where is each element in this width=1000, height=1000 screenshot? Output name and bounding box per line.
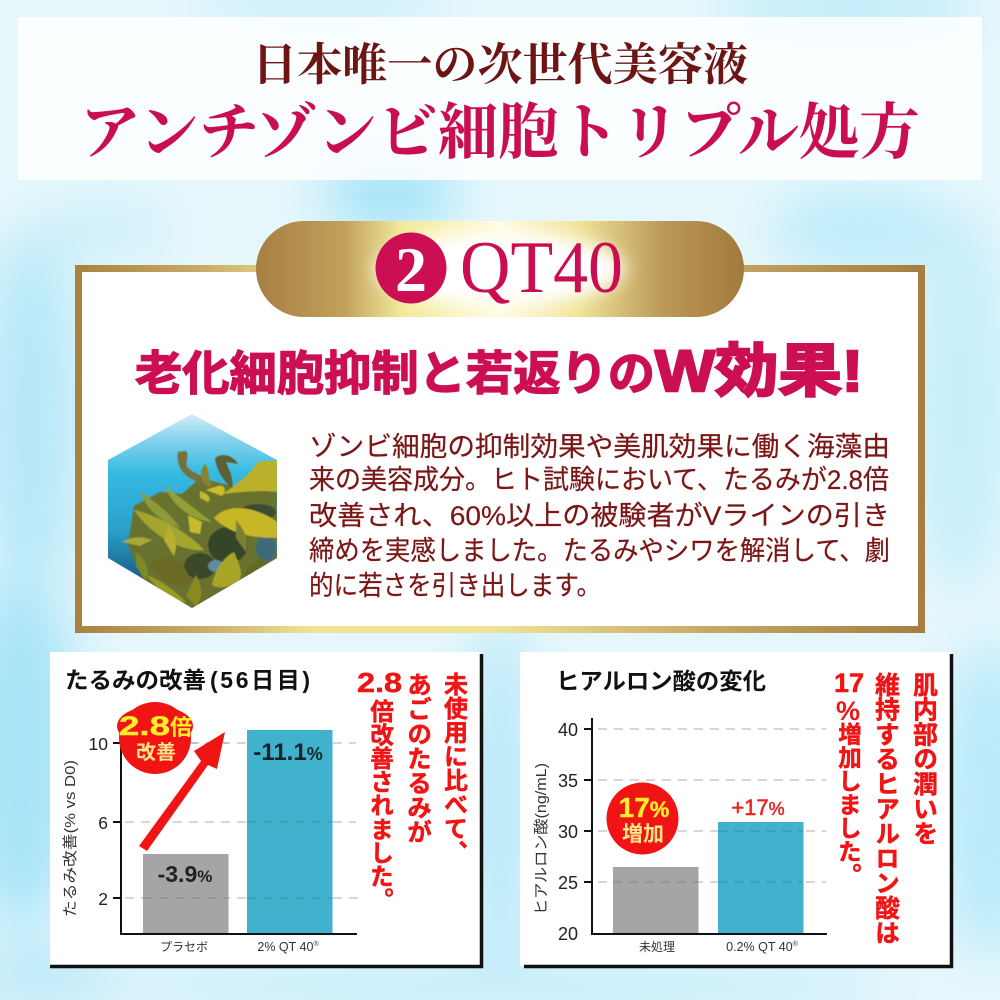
body text	[309, 432, 890, 601]
bar chart: sagging: 6	[98, 813, 108, 833]
body text: 締めを実感しました。たるみやシワを解消して、劇	[309, 536, 890, 566]
chart title: たるみの改善	[65, 667, 206, 693]
bar chart: hyaluronic acid: 40	[558, 720, 578, 740]
headline: W効果!	[655, 339, 863, 404]
badge: 17%: 17%	[619, 792, 669, 823]
number badge	[376, 232, 446, 305]
badge: 2.8x: 2.8	[119, 711, 170, 741]
bar chart: hyaluronic acid	[533, 718, 827, 954]
value: +17%: +17%	[731, 795, 785, 820]
side copy: あごのたるみが	[404, 672, 431, 844]
chart title: (56日目)	[210, 667, 310, 693]
badge: 2.8x	[117, 702, 193, 774]
chart card: sagging improvement	[50, 652, 482, 966]
x labels: プラセボ	[160, 940, 208, 954]
hexagon seaweed image	[108, 414, 278, 610]
bar chart: sagging	[62, 730, 364, 954]
badge: 17%: 増加	[622, 823, 664, 846]
bar: untreated	[613, 867, 698, 933]
title band	[18, 17, 982, 180]
body text: 改善され、60%以上の被験者がVラインの引き	[309, 501, 890, 531]
bar chart: hyaluronic acid: 25	[558, 873, 578, 893]
pill label: QT40	[460, 227, 623, 309]
gold pill header	[256, 221, 744, 317]
number badge: 2	[395, 234, 427, 305]
side copy: 2.8	[357, 667, 402, 698]
y axis label: ヒアルロン酸(ng/mL)	[533, 763, 550, 915]
badge: 17%	[606, 782, 678, 854]
side copy: 肌内部の潤いを	[910, 672, 938, 846]
bar: QT40	[247, 730, 332, 933]
bar chart: sagging: ®	[313, 940, 319, 948]
bar chart: hyaluronic acid: 20	[558, 924, 578, 944]
body text: 的に若さを引き出します。	[309, 571, 601, 601]
side copy: 17	[834, 668, 864, 698]
x labels: 未処理	[639, 940, 675, 954]
bar chart: sagging: 2% QT 40	[257, 940, 313, 954]
value: QT40: -11.1%	[253, 739, 323, 766]
chart title	[65, 667, 310, 693]
bar chart: sagging: 10	[89, 734, 108, 754]
side copy: 増加しました。	[835, 722, 862, 886]
y axis label: たるみ改善(% vs D0)	[62, 760, 79, 917]
side copy: %	[836, 696, 860, 726]
side copy: 倍改善されました。	[366, 699, 394, 911]
red arrow	[139, 732, 225, 851]
bar chart: hyaluronic acid: 35	[558, 771, 578, 791]
value: placebo: -3.9%	[158, 861, 212, 887]
bar: QT40	[718, 822, 804, 933]
title line 1: 日本唯一の次世代美容液	[252, 40, 748, 90]
headline: 老化細胞抑制と若返りの	[135, 347, 655, 400]
badge: 2.8x: 改善	[136, 741, 176, 764]
chart card: hyaluronic acid	[520, 652, 952, 966]
bar chart: sagging: 2	[98, 889, 108, 909]
side copy: 維持するヒアルロン酸は	[872, 672, 900, 945]
bar chart: hyaluronic acid: 30	[558, 822, 578, 842]
title line 2: アンチゾンビ細胞トリプル処方	[80, 100, 920, 167]
bar chart: hyaluronic acid: 0.2% QT 40	[726, 940, 793, 954]
bar: placebo	[143, 854, 228, 933]
body text: ゾンビ細胞の抑制効果や美肌効果に働く海藻由	[309, 432, 890, 462]
side copy	[357, 667, 468, 911]
body text: 来の美容成分。ヒト試験において、たるみが2.8倍	[309, 465, 889, 495]
bar chart: hyaluronic acid: ®	[793, 940, 799, 948]
chart title: ヒアルロン酸の変化	[556, 668, 766, 694]
headline	[135, 339, 863, 404]
side copy: 未使用に比べて、	[440, 672, 468, 864]
side copy	[834, 668, 938, 945]
badge: 2.8x: 倍	[170, 715, 192, 740]
main panel with gold frame	[78, 221, 922, 630]
